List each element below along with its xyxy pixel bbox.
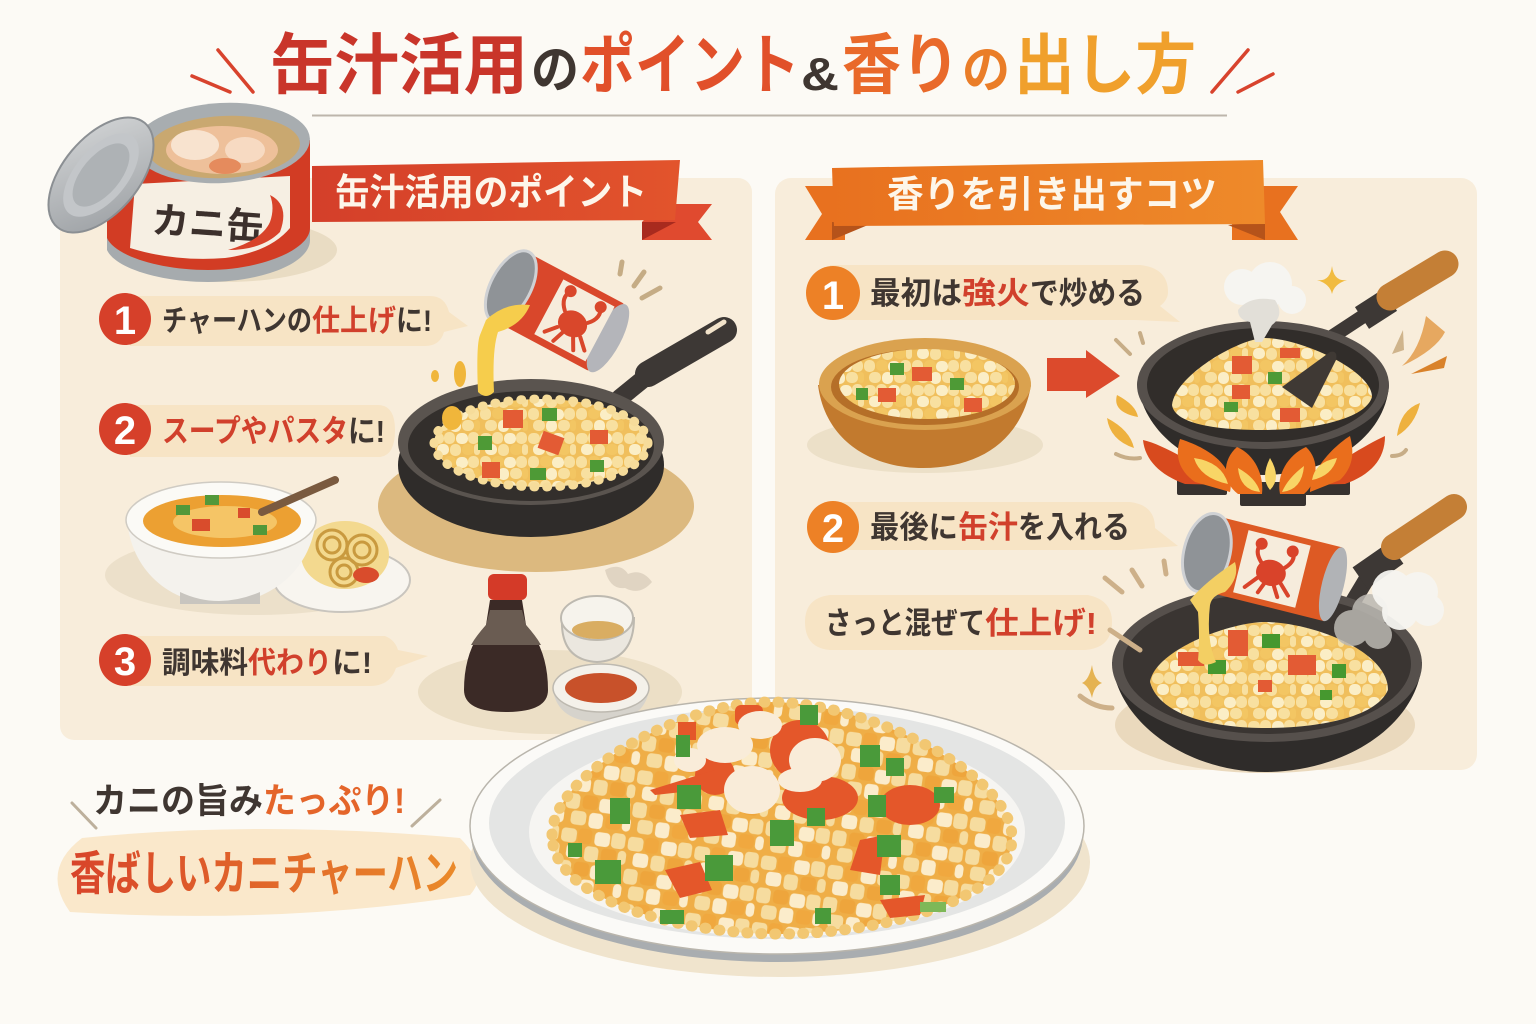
illustration: wooden bowl of rice — [807, 338, 1043, 473]
callout: dish tagline: たっぷり! — [263, 782, 405, 821]
callout: right tip 2: を入れる — [1018, 510, 1130, 545]
callout: right tip 1: 1 — [822, 274, 844, 318]
flames — [1143, 436, 1385, 494]
panel: right background — [775, 178, 1477, 770]
illustration: soy sauce and small dishes — [418, 567, 682, 734]
steam cloud — [1224, 262, 1306, 314]
ribbon: left heading: 缶汁活用のポイント — [335, 172, 647, 213]
plate — [471, 706, 1083, 962]
illustration: frying pan with fried rice — [378, 322, 724, 572]
callout: tip 3: 代わり — [248, 647, 332, 680]
callout: tip 1: に! — [396, 305, 432, 338]
title: ポイント — [580, 28, 800, 102]
callout: mix and finish — [805, 595, 1112, 650]
illustration: wok with can pouring juice — [1080, 507, 1454, 773]
rice in pan — [434, 399, 648, 487]
motion accents — [1080, 561, 1166, 708]
scallions — [568, 705, 954, 924]
cup — [562, 618, 634, 662]
callout: tip 3: 3 — [114, 640, 136, 684]
wok handle — [1330, 264, 1445, 338]
wok handle — [1342, 507, 1454, 620]
steam — [1334, 594, 1392, 649]
soy sauce bottle — [464, 600, 548, 712]
tagline cream backing — [58, 829, 479, 916]
title: の — [531, 42, 579, 100]
can lid — [28, 98, 174, 252]
burner — [1177, 475, 1350, 506]
ribbon: right heading — [805, 160, 1298, 240]
juice — [1190, 562, 1236, 665]
spatula — [1282, 352, 1336, 408]
title — [192, 28, 1273, 102]
motion accents — [1392, 316, 1447, 374]
can label text: カニ缶 — [150, 200, 265, 248]
rice mound — [552, 702, 1012, 934]
arrow — [1047, 350, 1120, 398]
crab meat — [166, 126, 278, 174]
plate shadow — [470, 747, 1090, 977]
title: 出し方 — [1014, 28, 1196, 102]
can body — [107, 140, 310, 282]
callout: right tip 1: で炒める — [1030, 276, 1145, 311]
callout: right tip 1: 最初は — [870, 276, 962, 311]
callout: tip 1 — [99, 293, 468, 346]
title: 香り — [842, 28, 960, 102]
callout: tip 3: に! — [332, 647, 372, 680]
title: の — [962, 42, 1010, 100]
steam squiggle — [605, 567, 652, 591]
callout: tip 1: チャーハンの — [162, 305, 312, 338]
illustration: can pouring juice — [431, 243, 660, 430]
callout: dish tagline — [58, 782, 479, 916]
panel: left background — [60, 178, 752, 740]
can — [1175, 508, 1353, 626]
rice — [1150, 622, 1388, 728]
callout: right tip 1: 強火 — [962, 276, 1030, 311]
callout: right tip 2 — [807, 501, 1178, 553]
callout: tip 2: 2 — [114, 409, 136, 453]
rice in wok — [1172, 338, 1372, 430]
callout: right tip 2: 2 — [822, 507, 844, 551]
callout: mix and finish: 仕上げ! — [985, 606, 1097, 641]
illustration: plate of crab fried rice — [470, 698, 1090, 977]
illustration: crab can with lid — [28, 98, 337, 282]
pan handle — [620, 322, 724, 398]
callout: right tip 2: 最後に — [870, 510, 958, 545]
callout: dish tagline: カニの旨み — [93, 782, 263, 821]
callout: dish tagline: 香ばしいカニチャーハン — [70, 847, 458, 900]
title: 缶汁活用 — [270, 28, 528, 102]
title: & — [801, 48, 839, 100]
callout: tip 3: 調味料 — [162, 647, 248, 680]
ribbon: right heading: 香りを引き出すコツ — [887, 174, 1217, 215]
callout: tip 2: スープやパスタ — [162, 414, 348, 449]
callout: tip 2 — [99, 403, 395, 457]
title accent strokes left — [192, 50, 253, 92]
callout: right tip 1 — [806, 265, 1180, 322]
callout: right tip 2: 缶汁 — [958, 510, 1018, 545]
soup bowl — [127, 518, 316, 604]
illustration: soup bowl and pasta plate — [105, 480, 410, 615]
juice stream — [477, 305, 530, 396]
title accent strokes right — [1212, 50, 1273, 92]
illustration: wok over flame — [1107, 262, 1447, 506]
ribbon: left heading — [312, 160, 712, 240]
pasta plate — [274, 548, 410, 612]
callout: tip 1: 1 — [114, 299, 136, 343]
shadow — [1115, 677, 1415, 773]
sparkle — [1317, 266, 1347, 294]
callout: tip 3 — [99, 634, 428, 686]
callout: tip 2: に! — [348, 414, 385, 449]
callout: tip 1: 仕上げ — [312, 305, 396, 338]
sauce dish — [553, 690, 649, 722]
crab and tomato pieces — [650, 705, 940, 918]
callout: mix and finish: さっと混ぜて — [825, 606, 985, 641]
